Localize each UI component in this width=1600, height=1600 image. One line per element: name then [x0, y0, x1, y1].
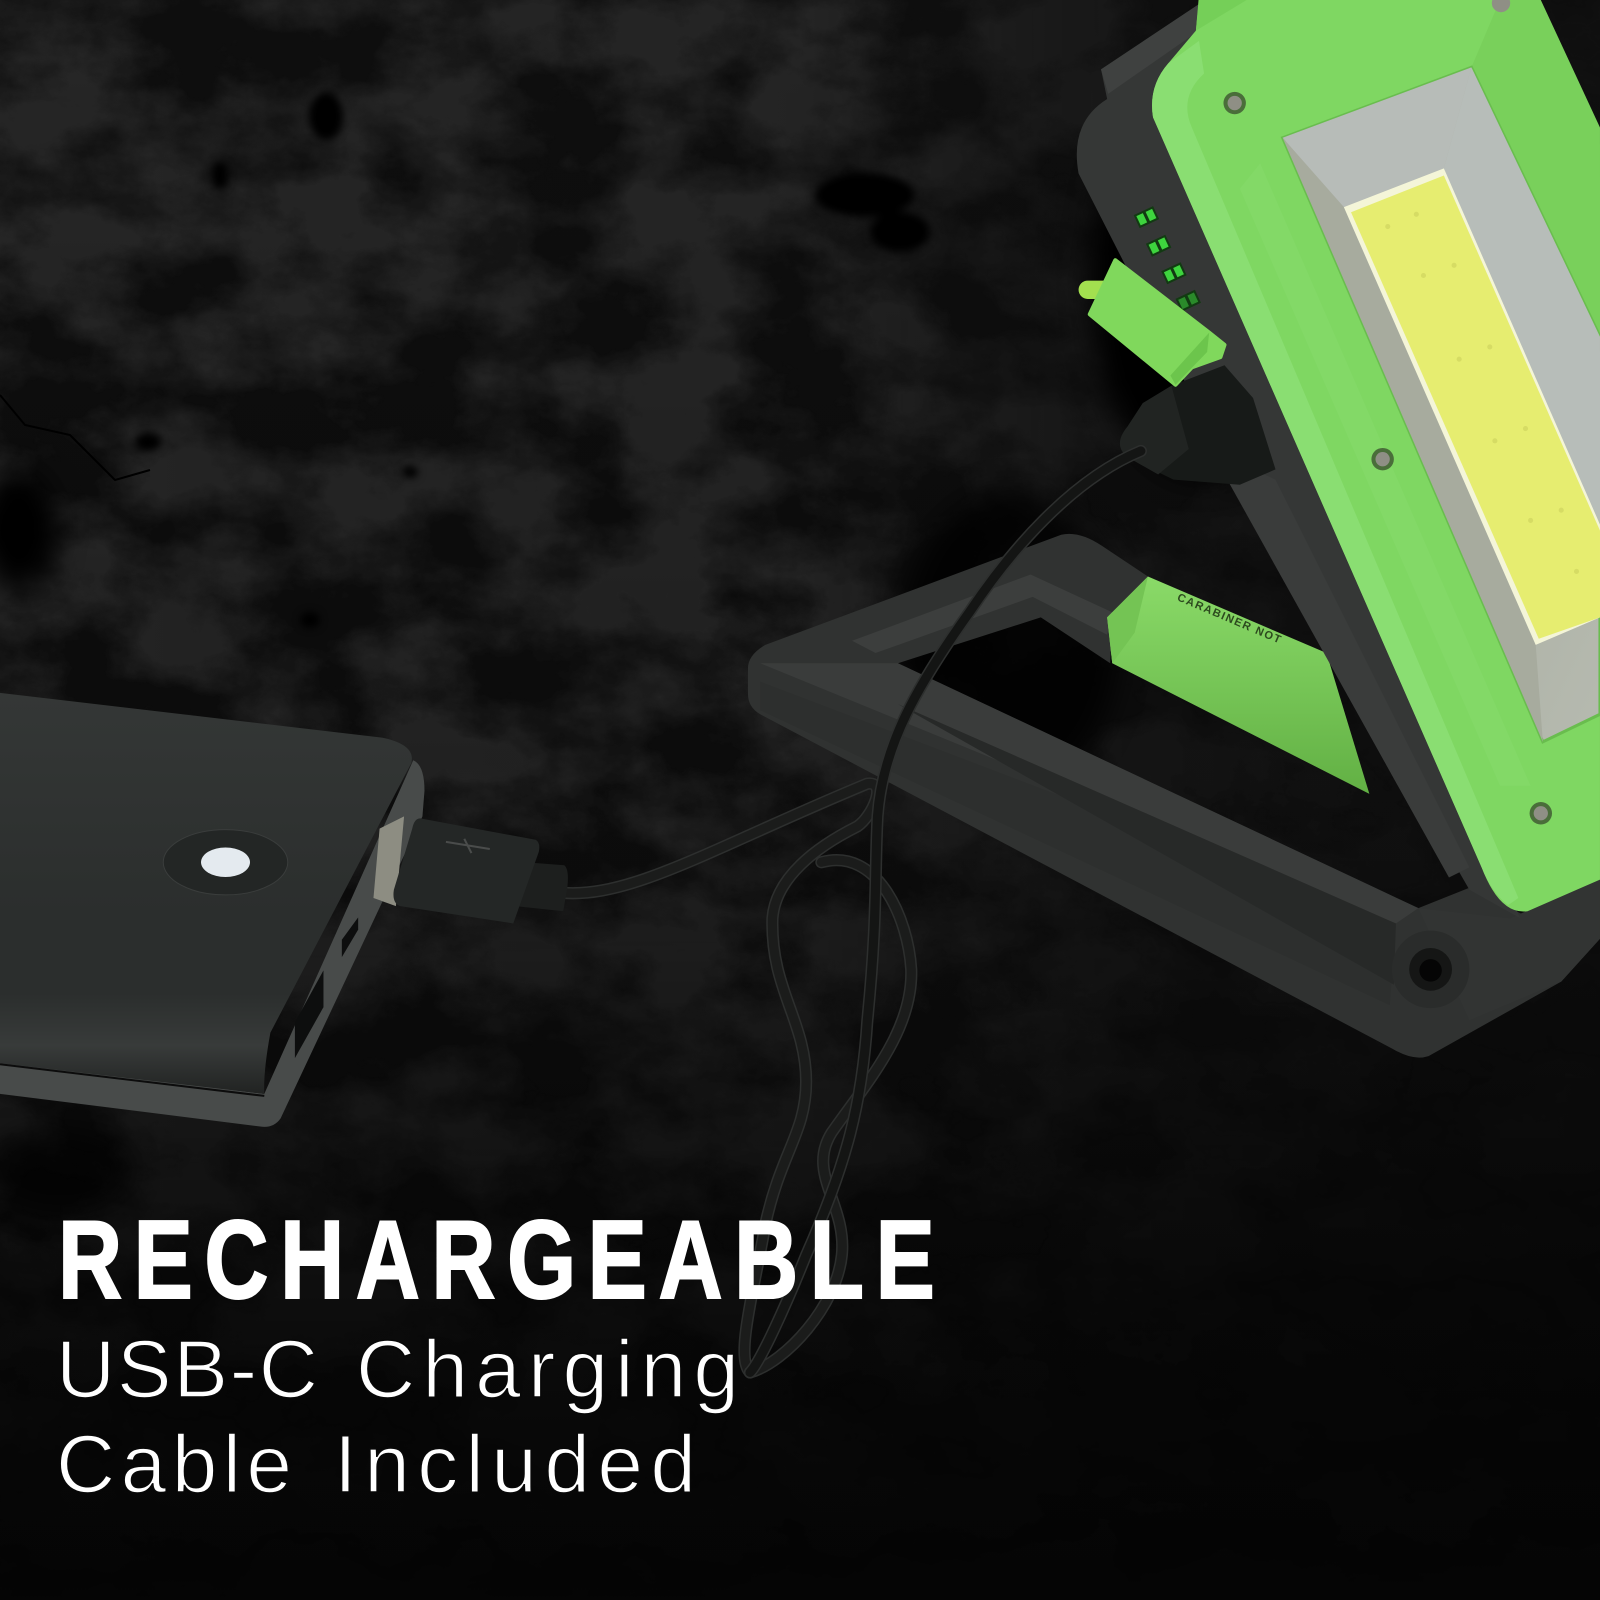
power bank side and bottom — [0, 760, 424, 1127]
USB trident mark — [446, 839, 490, 853]
light: grey reflector panel — [1283, 67, 1600, 742]
subheading line 2 — [56, 1419, 696, 1510]
light: dark rear housing — [1077, 4, 1520, 918]
hinge with hole — [1392, 931, 1469, 1008]
carabiner arm — [1107, 577, 1369, 794]
subheading line 1: Charging — [356, 1324, 739, 1415]
screws — [1223, 0, 1552, 824]
subheading line 2: Included — [334, 1419, 696, 1510]
arm label text: CARABINER NOT — [1175, 592, 1284, 647]
stand: folding base frame — [748, 534, 1600, 1058]
light: green rubber frame — [1152, 0, 1600, 912]
battery level LEDs — [1134, 206, 1201, 312]
subheading line 2: Cable — [56, 1419, 292, 1510]
background: dark grunge wall — [0, 0, 1600, 1276]
power bank — [0, 693, 424, 1127]
heading: RECHARGEABLE: RECHARGEABLE — [58, 1199, 935, 1322]
subheading line 1 — [56, 1324, 739, 1415]
silicone port cover tab — [1088, 260, 1224, 385]
power button — [163, 830, 288, 895]
light: yellow COB LED strip — [1344, 168, 1600, 645]
charging cable — [563, 451, 1141, 1372]
micro USB port — [342, 917, 358, 957]
USB-A port — [295, 970, 323, 1058]
subheading line 1: USB-C — [56, 1324, 318, 1415]
USB-C plug at light — [1120, 365, 1276, 485]
power bank top face — [0, 693, 412, 1094]
USB plug at power bank — [373, 816, 568, 923]
